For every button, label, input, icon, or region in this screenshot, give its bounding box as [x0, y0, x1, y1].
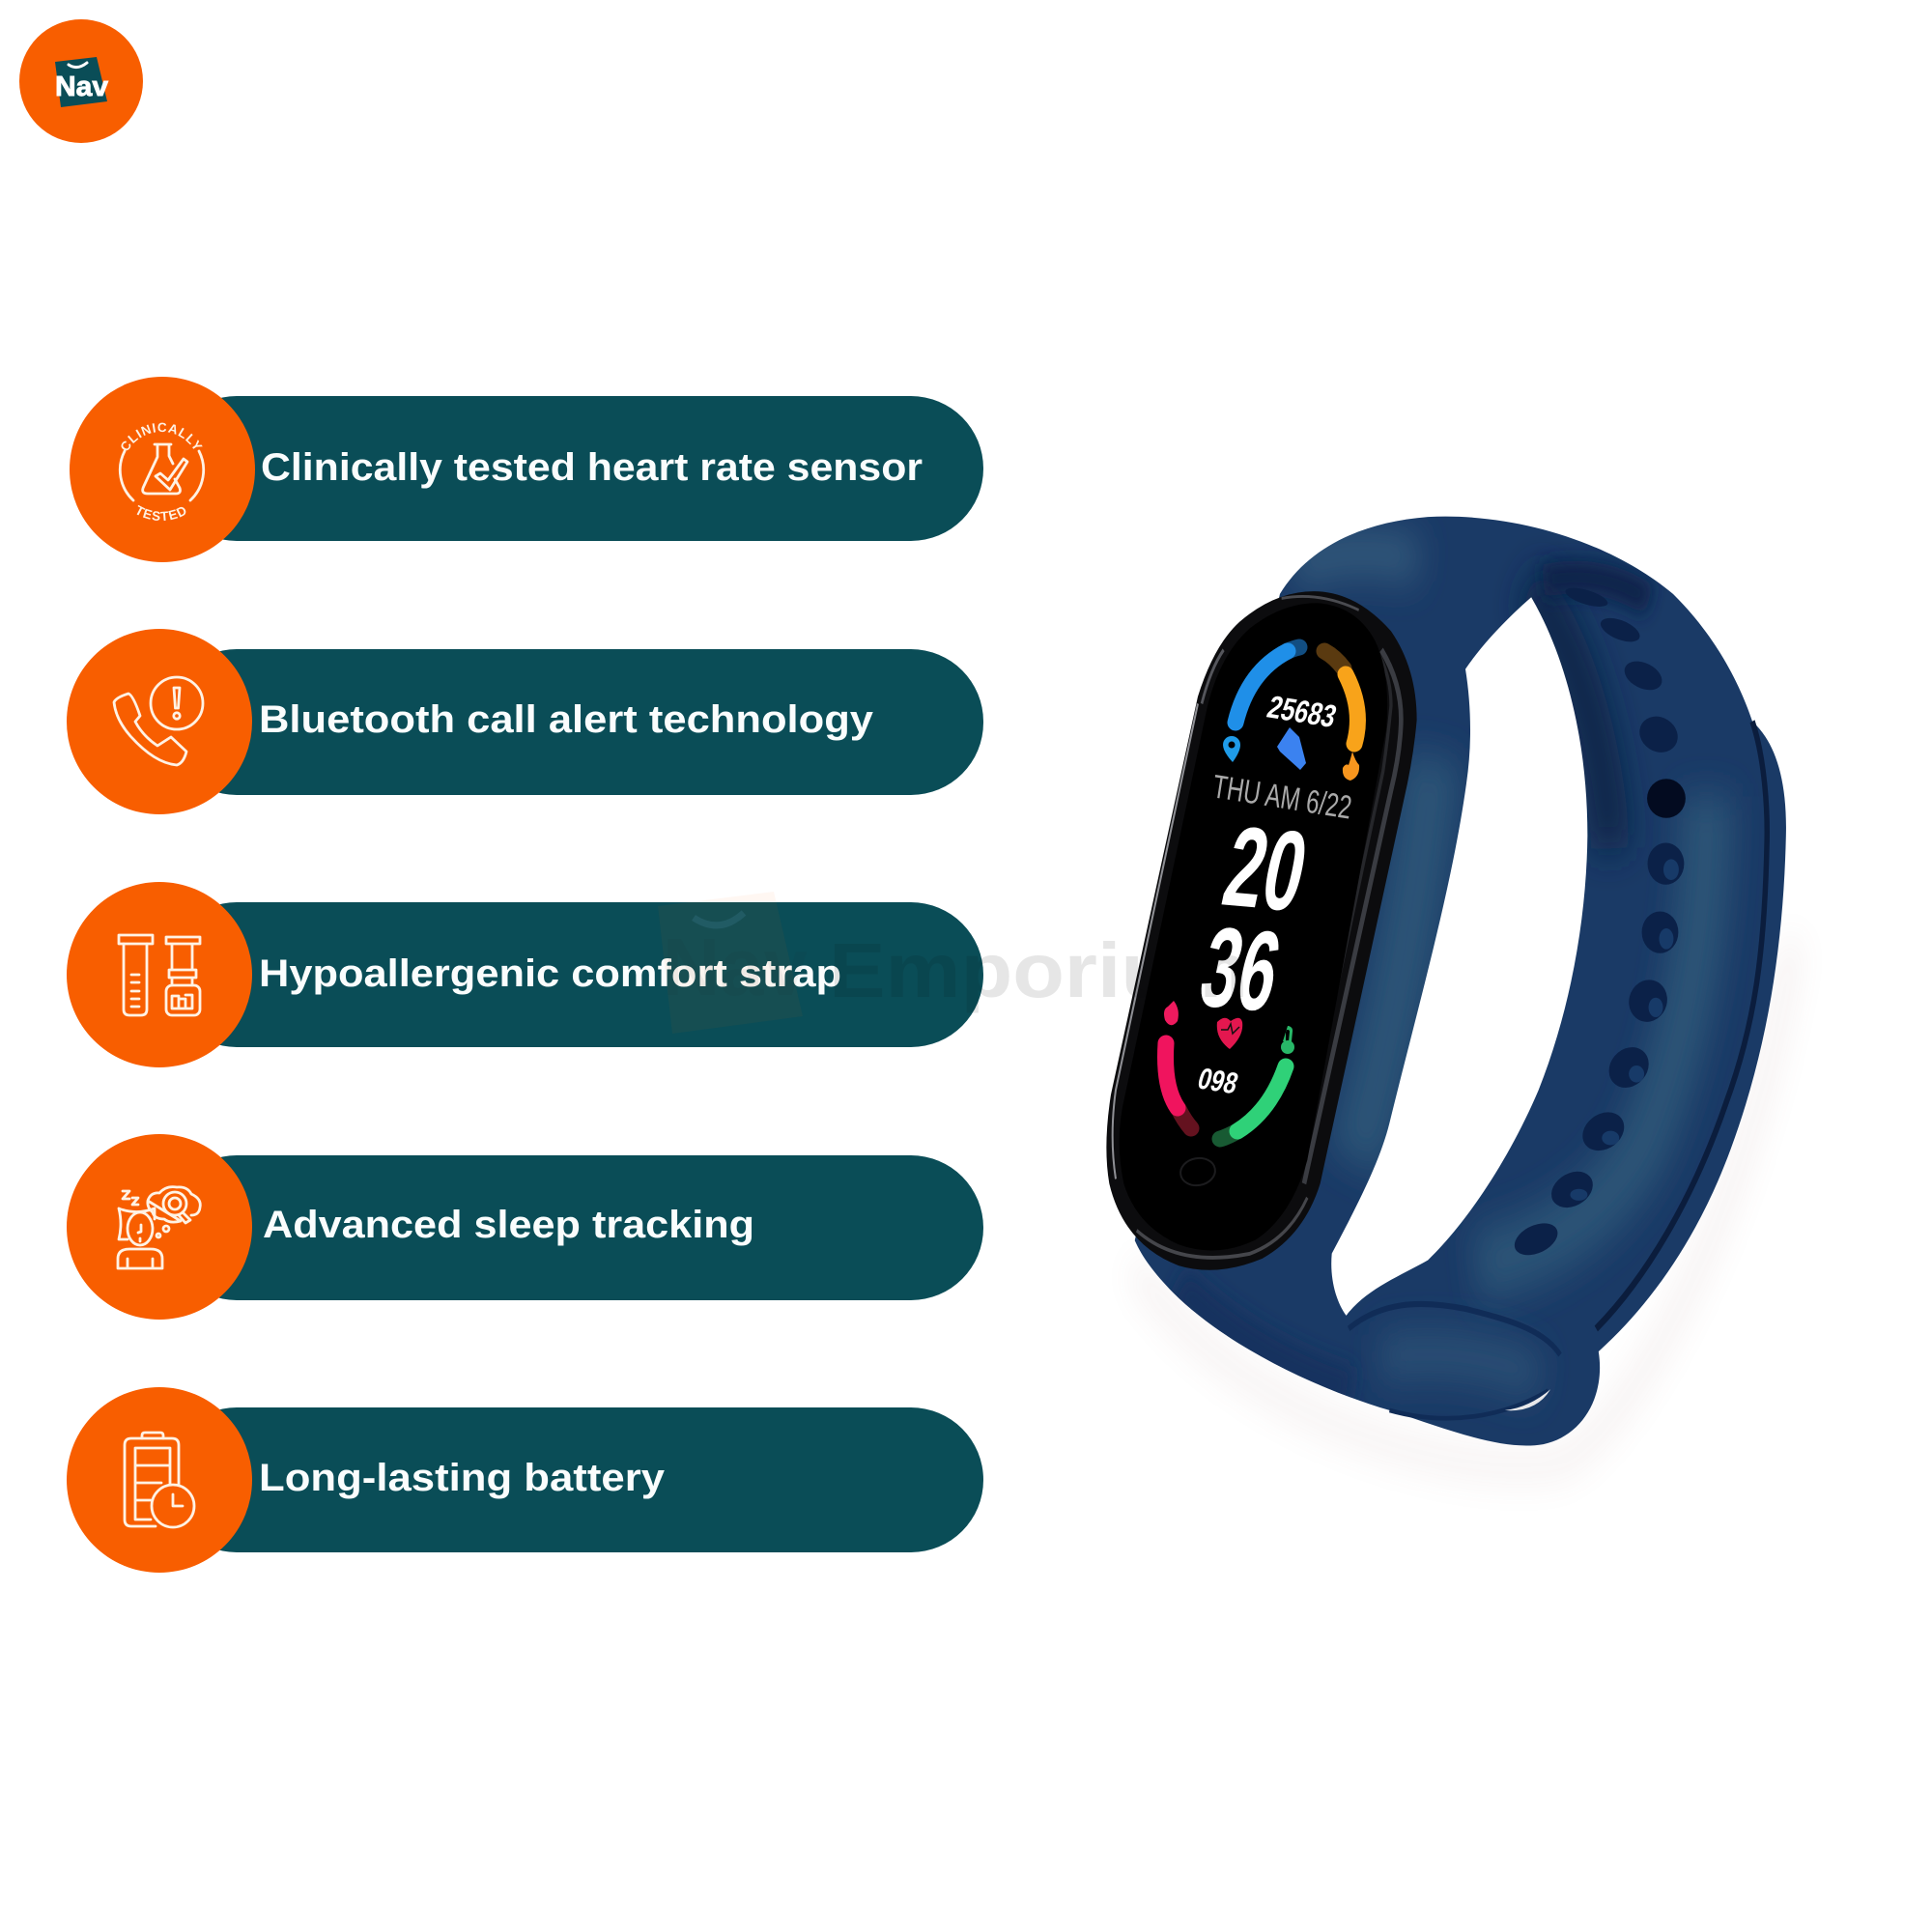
logo: Nav badge	[19, 19, 143, 143]
feature row: bluetooth call alert: Bluetooth call alert technology	[259, 698, 874, 741]
screen text: THU AM 6/22	[1210, 768, 1354, 827]
icon: apple	[1164, 1001, 1179, 1025]
icon: battery with clock	[125, 1433, 194, 1527]
icon: heart	[1217, 1018, 1242, 1049]
icon: shoe	[1277, 727, 1306, 770]
feature row: bluetooth call alert	[67, 629, 983, 814]
icon: phone with alert	[114, 677, 203, 765]
feature row: hypoallergenic strap	[67, 882, 983, 1067]
watermark: Nav Emporium	[658, 892, 1248, 1034]
product: smart band	[1106, 517, 1793, 1465]
strap opening	[1331, 597, 1587, 1316]
screen text	[1191, 690, 1354, 1100]
feature row: clinically tested: Clinically tested heart rate sensor	[261, 446, 923, 489]
icon: sleep person with thought cloud	[118, 1187, 200, 1268]
screen text: 36	[1191, 904, 1291, 1036]
screen arcs	[1165, 647, 1357, 1139]
watermark: Nav Emporium: Nav	[663, 922, 808, 1012]
screen	[1120, 603, 1387, 1251]
icon: clinically tested flask: TESTED	[137, 504, 185, 521]
screen text: 098	[1194, 1062, 1242, 1100]
icon: pin	[1223, 736, 1240, 762]
icon: test tubes	[119, 935, 200, 1015]
feature row: battery: Long-lasting battery	[259, 1457, 666, 1499]
watch body	[1106, 591, 1417, 1270]
watermark: Nav Emporium: Emporium	[829, 927, 1248, 1013]
icon: lock	[1281, 1026, 1294, 1054]
strap holes	[1512, 584, 1686, 1261]
home button	[1179, 1155, 1217, 1188]
icon: clinically tested flask	[118, 423, 205, 521]
feature row: clinically tested	[70, 377, 983, 562]
logo: Nav badge: Nav	[55, 71, 108, 102]
screen text: 20	[1214, 804, 1318, 935]
screen icons	[1223, 736, 1240, 762]
feature row: sleep tracking: Advanced sleep tracking	[263, 1204, 754, 1246]
feature row: hypoallergenic strap: Hypoallergenic comfort strap	[259, 952, 841, 995]
feature row: battery	[67, 1387, 983, 1573]
icon: clinically tested flask: CLINICALLY	[122, 423, 203, 450]
icon: flame	[1343, 752, 1359, 781]
keeper loop	[1349, 1304, 1560, 1354]
strap outer edge lines	[1596, 722, 1767, 1328]
screen text: 25683	[1264, 690, 1341, 735]
band shadow	[1135, 940, 1793, 1465]
feature row: sleep tracking	[67, 1134, 983, 1320]
strap	[1135, 517, 1786, 1445]
